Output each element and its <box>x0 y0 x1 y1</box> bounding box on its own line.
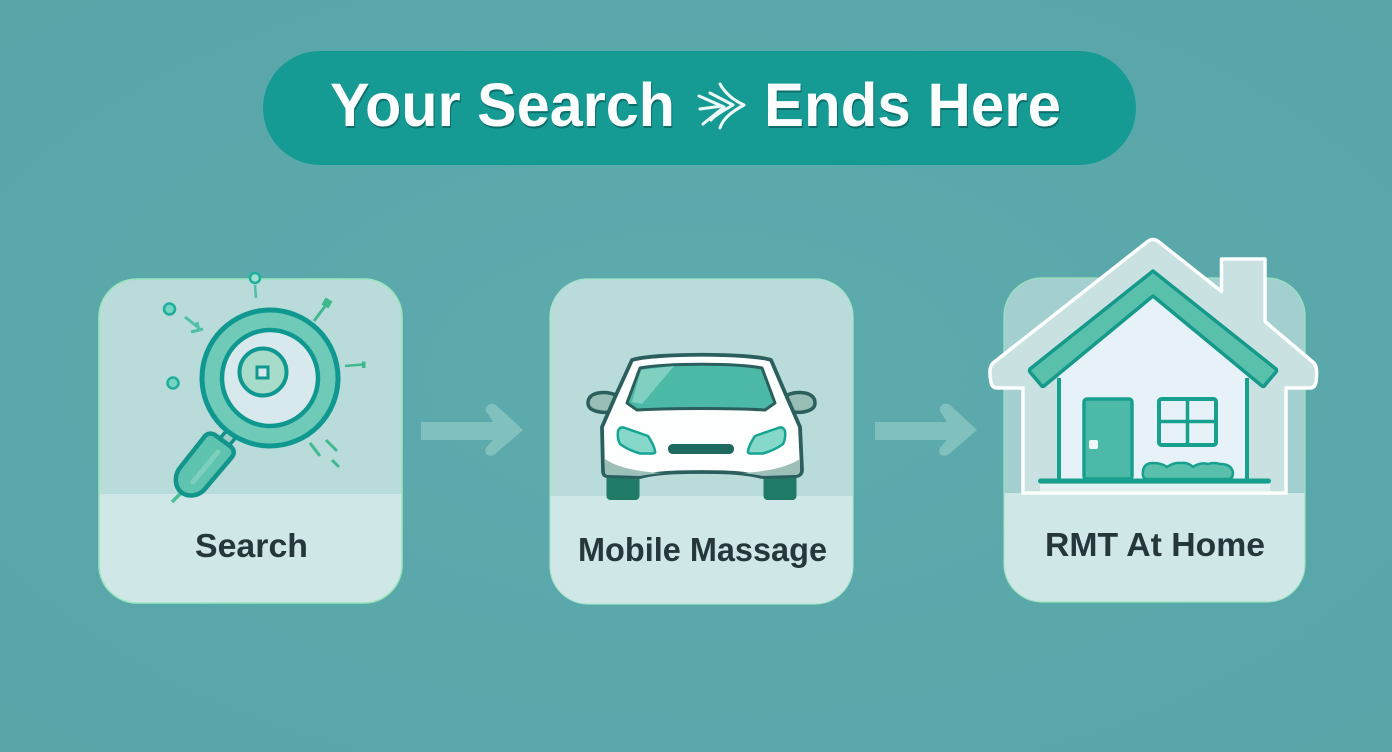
label: mobile massage: Mobile Massage <box>578 531 827 568</box>
title text: Your Search: Your Search <box>330 71 675 139</box>
icon: magnifying glass <box>172 310 338 502</box>
label: search: Search <box>195 527 308 564</box>
arrow: mobile massage to home <box>875 404 977 456</box>
panel: mobile massage <box>550 279 853 604</box>
title banner <box>263 51 1136 165</box>
icon: house <box>990 240 1317 493</box>
icon: search sparkles <box>164 273 366 467</box>
icon: car <box>588 355 815 500</box>
title text: Ends Here: Ends Here <box>764 71 1061 139</box>
arrow: search to mobile massage <box>421 404 523 456</box>
label: rmt at home: RMT At Home <box>1045 526 1265 563</box>
panel: search <box>99 273 402 603</box>
panel: rmt at home <box>990 240 1317 602</box>
icon: double chevron <box>699 84 744 128</box>
